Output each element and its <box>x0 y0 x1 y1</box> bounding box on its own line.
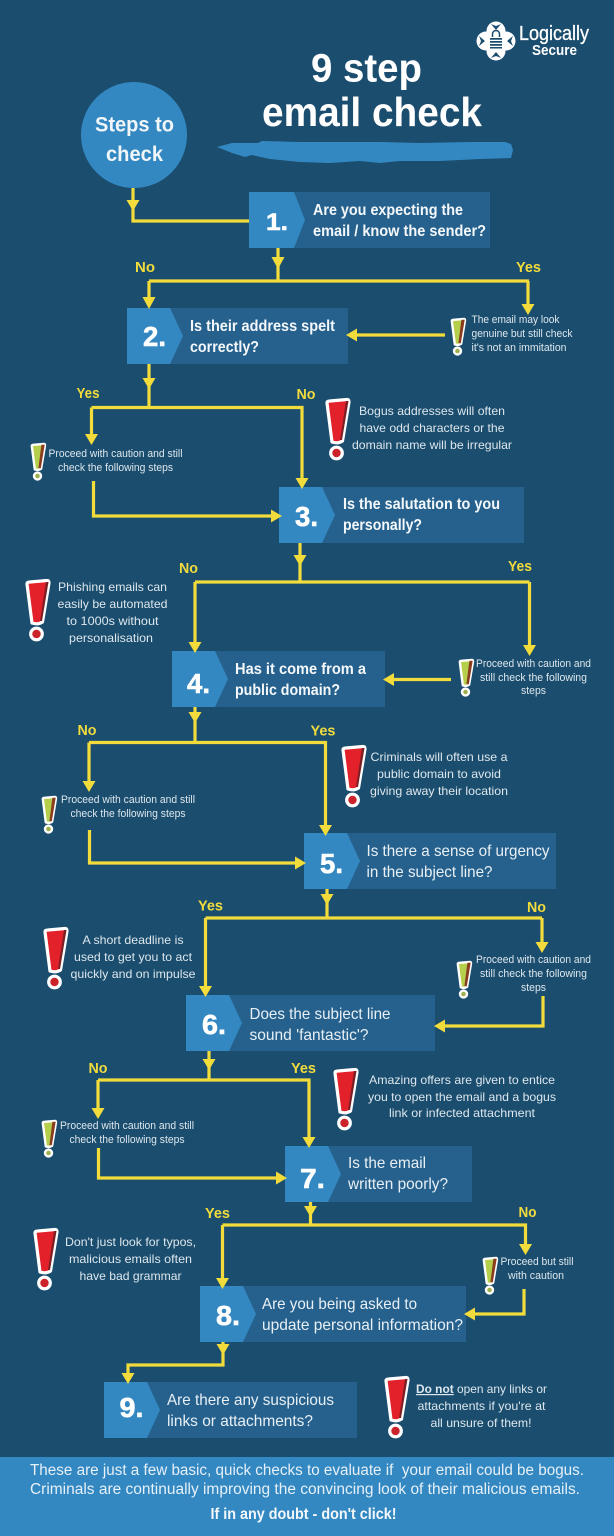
step 5: in the subject line? <box>366 864 493 881</box>
footer band: These are just a few basic, quick checks to evaluate if your email could be bogus. <box>30 1462 584 1479</box>
step 1 <box>249 192 490 248</box>
note: proceed 3: still check the following <box>480 672 587 684</box>
note: proceed 6: check the following steps <box>70 1134 185 1146</box>
note: proceed 3: Proceed with caution and <box>476 658 591 670</box>
note: may look genuine: The email may look <box>472 314 560 326</box>
step 2: 2. <box>143 321 166 352</box>
branch labels <box>76 260 546 1222</box>
title: 9 step <box>311 46 422 90</box>
step 7 <box>285 1146 472 1202</box>
start circle: Steps to check <box>81 82 187 188</box>
warning: public domain <box>343 746 508 806</box>
note: proceed with caution 2: Proceed with caution and still <box>48 448 182 460</box>
step 1: 1. <box>266 209 288 236</box>
branch labels: No <box>135 260 155 276</box>
step 3: personally? <box>343 517 422 534</box>
note: proceed 4: Proceed with caution and still <box>61 794 195 806</box>
warning: public domain: Criminals will often use a <box>370 750 508 764</box>
warning: amazing offers: link or infected attachment <box>389 1106 536 1120</box>
branch labels: No <box>518 1205 537 1221</box>
footer band: Criminals are continually improving the convincing look of their malicious emails. <box>30 1481 580 1498</box>
warning: amazing offers: Amazing offers are given to entice <box>369 1073 555 1087</box>
step 5: Is there a sense of urgency <box>366 843 550 860</box>
step 9 <box>104 1382 357 1438</box>
warning: short deadline: used to get you to act <box>74 950 193 964</box>
note: proceed 5: Proceed with caution and <box>476 954 591 966</box>
branch labels: Yes <box>508 559 532 575</box>
step 3 <box>279 487 524 543</box>
step 6 <box>186 995 435 1051</box>
title: email check <box>262 89 482 135</box>
step 9: Are there any suspicious <box>167 1392 334 1409</box>
warning: do not open <box>386 1378 547 1437</box>
step 8: update personal information? <box>262 1317 463 1334</box>
step 3: 3. <box>295 501 318 532</box>
step 8: 8. <box>216 1300 240 1331</box>
connectors: yellow flow lines <box>82 188 548 1384</box>
note: proceed but: with caution <box>507 1270 564 1282</box>
step 6: 6. <box>202 1009 226 1040</box>
brush stroke under title <box>217 141 513 163</box>
step 8 <box>200 1286 466 1342</box>
warning: short deadline: A short deadline is <box>82 933 184 947</box>
note: proceed but: Proceed but still <box>500 1256 574 1268</box>
warning: phishing: easily be automated <box>58 597 168 611</box>
step 1: email / know the sender? <box>313 223 486 240</box>
step 9: links or attachments? <box>167 1413 313 1430</box>
note: proceed 4 <box>43 794 195 832</box>
warning: phishing: to 1000s without <box>66 614 159 628</box>
warning: bogus addresses: Bogus addresses will often <box>359 404 505 418</box>
step 3: Is the salutation to you <box>343 496 500 513</box>
branch labels: Yes <box>76 386 100 402</box>
step 7: Is the email <box>348 1155 426 1172</box>
note: may look genuine <box>452 314 573 354</box>
branch labels: No <box>179 561 198 577</box>
branch labels: No <box>296 387 316 403</box>
branch labels: Yes <box>310 724 336 740</box>
branch labels: No <box>78 723 97 739</box>
step 2: correctly? <box>190 339 259 356</box>
warning: public domain: giving away their location <box>370 784 508 798</box>
step 7: written poorly? <box>347 1176 448 1193</box>
warning: typos: Don't just look for typos, <box>65 1235 196 1249</box>
branch labels: No <box>527 900 546 916</box>
step 6: sound 'fantastic'? <box>250 1027 369 1044</box>
logo: Logically Secure: Secure <box>532 42 577 59</box>
step 9: 9. <box>120 1392 144 1423</box>
warning: phishing: Phishing emails can <box>58 580 167 594</box>
warning: typos: have bad grammar <box>80 1269 182 1283</box>
logo: Logically Secure: Logically <box>519 23 589 45</box>
note: proceed with caution 2: check the following steps <box>58 462 174 474</box>
warning: bogus addresses <box>327 400 512 459</box>
note: proceed 3 <box>460 658 591 697</box>
warning: typos: malicious emails often <box>69 1252 192 1266</box>
warning: phishing: personalisation <box>69 631 153 645</box>
warning: do not open: all unsure of them! <box>430 1416 532 1430</box>
start circle: Steps to check: check <box>106 143 163 166</box>
note: proceed 5: steps <box>521 982 547 994</box>
branch labels: Yes <box>291 1061 316 1077</box>
step 4: Has it come from a <box>235 661 366 678</box>
note: proceed 3: steps <box>521 685 547 697</box>
step 2 <box>127 308 348 364</box>
note: may look genuine: genuine but still check <box>472 328 573 340</box>
step 8: Are you being asked to <box>262 1296 417 1313</box>
footer band <box>0 1457 614 1536</box>
note: proceed 5: still check the following <box>480 968 587 980</box>
warning: bogus addresses: have odd characters or the <box>360 421 505 435</box>
start circle: Steps to check: Steps to <box>95 114 174 136</box>
step 4: 4. <box>187 668 210 699</box>
note: proceed 6 <box>43 1120 194 1156</box>
warning: bogus addresses: domain name will be irregular <box>352 438 512 452</box>
branch labels: Yes <box>205 1206 230 1222</box>
warning: do not open: Do not open any links or <box>416 1382 547 1396</box>
note: proceed but <box>484 1256 574 1293</box>
note: proceed 4: check the following steps <box>70 808 186 820</box>
branch labels: No <box>88 1061 108 1077</box>
note: proceed 5 <box>458 954 591 997</box>
note: proceed 6: Proceed with caution and still <box>60 1120 194 1132</box>
step 1: Are you expecting the <box>313 202 463 219</box>
warning: short deadline <box>45 928 196 988</box>
warning: amazing offers <box>335 1070 556 1129</box>
title <box>262 46 482 135</box>
warning: do not open: attachments if you're at <box>418 1399 546 1413</box>
note: may look genuine: it's not an immitation <box>472 342 566 354</box>
step 4: public domain? <box>235 682 340 699</box>
step 5 <box>304 833 556 889</box>
warning: phishing <box>27 580 168 645</box>
step 4 <box>172 651 385 707</box>
step 5: 5. <box>320 848 343 879</box>
branch labels: Yes <box>198 898 223 914</box>
warning: public domain: public domain to avoid <box>377 767 501 781</box>
warning: typos <box>35 1230 196 1289</box>
step 6: Does the subject line <box>250 1006 391 1023</box>
branch labels: Yes <box>516 260 541 276</box>
note: proceed with caution 2 <box>32 444 182 479</box>
step 2: Is their address spelt <box>190 318 336 335</box>
warning: short deadline: quickly and on impulse <box>70 967 196 981</box>
footer band: If in any doubt - don't click! <box>210 1506 396 1523</box>
warning: amazing offers: you to open the email and a bogus <box>368 1090 556 1104</box>
step 7: 7. <box>300 1163 325 1194</box>
logo: Logically Secure <box>476 22 589 60</box>
